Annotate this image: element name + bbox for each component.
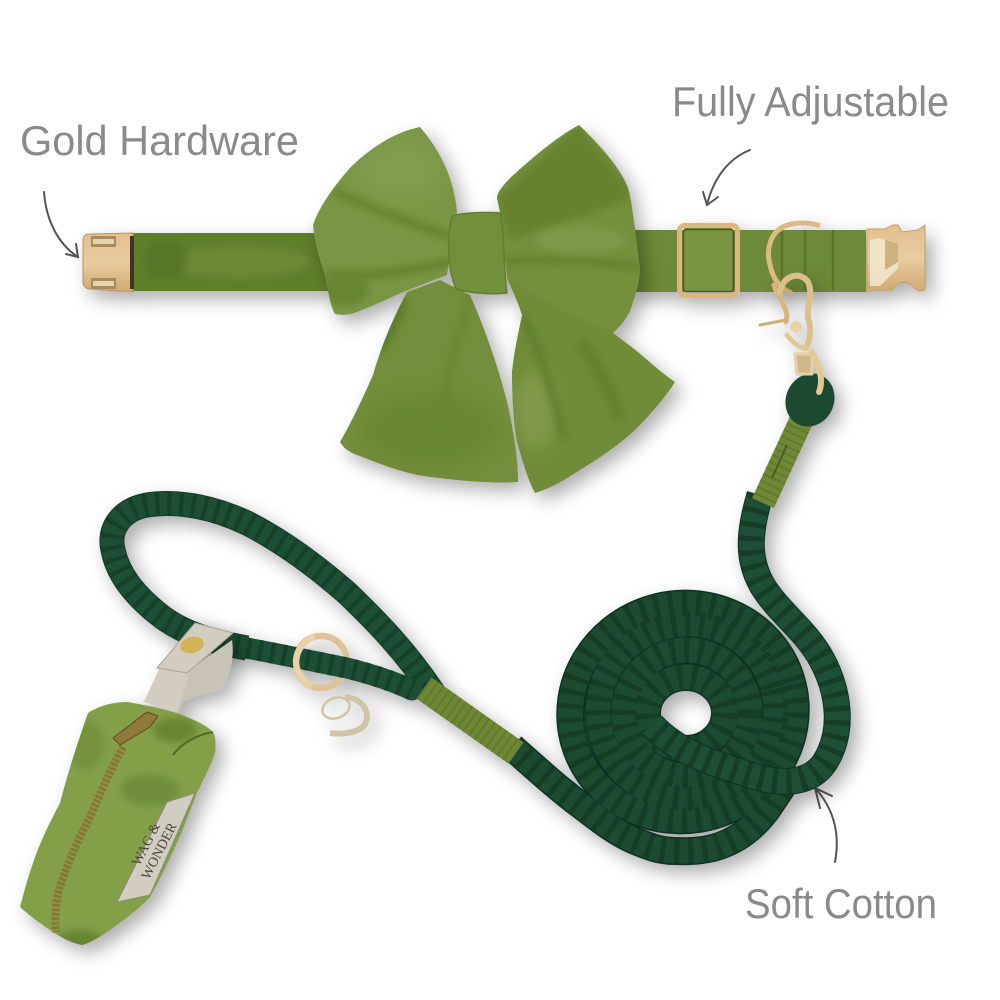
swivel clip [760,276,821,392]
rope: top strand over coil [652,495,837,781]
handle wrap [424,688,516,753]
left buckle [83,233,134,292]
arrow: gold hardware [44,192,78,257]
right buckle [867,225,925,292]
bow tail left [330,270,530,490]
strap pleats [782,230,833,290]
arrow: soft cotton [815,788,837,862]
bow tail right [500,270,680,500]
label: Gold Hardware: Gold Hardware [20,117,299,164]
upper wrap [763,421,801,503]
arrow: fully adjustable [703,150,750,205]
brand label: WAG & [130,820,164,868]
strap flap [157,623,233,673]
rope: handle loop [112,504,435,695]
collar [83,223,925,296]
left strap velvet shading [143,240,310,280]
brand label [117,793,195,902]
leash [112,276,843,851]
slider buckle [680,226,738,296]
collar strap: right [630,230,866,292]
strap back [150,640,233,713]
label: Soft Cotton: Soft Cotton [745,880,937,927]
bow knot [449,212,507,294]
ring front arc [296,637,315,686]
zipper [55,747,123,932]
rope: handle return [235,646,412,690]
rope: coil [512,580,819,851]
charm [319,694,367,734]
strap front band [144,667,190,713]
D ring [769,223,820,293]
sailor bow [305,120,680,500]
zipper pull [113,712,158,745]
brand label: WONDER [139,820,181,882]
poop bag holder [10,623,233,955]
pouch body [10,695,225,955]
ring behind rope [295,636,347,688]
strap under slider [684,228,732,292]
collar strap: left [133,233,330,291]
bow loop left [305,120,465,320]
label: Fully Adjustable: Fully Adjustable [672,78,949,125]
bow loop right [490,120,645,340]
rope knot [777,365,843,435]
snap button [178,634,206,656]
